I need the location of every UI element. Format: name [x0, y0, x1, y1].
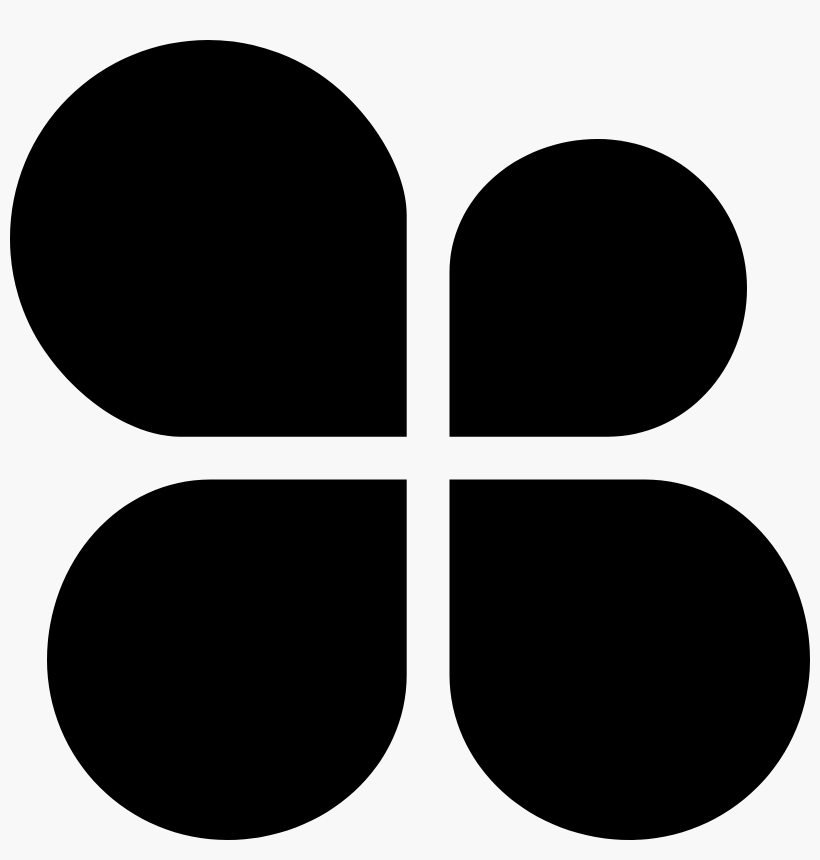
petal: top right	[450, 139, 747, 437]
petal: bottom left	[47, 480, 407, 840]
petal: top left	[10, 40, 407, 437]
petal: bottom right	[450, 480, 810, 840]
